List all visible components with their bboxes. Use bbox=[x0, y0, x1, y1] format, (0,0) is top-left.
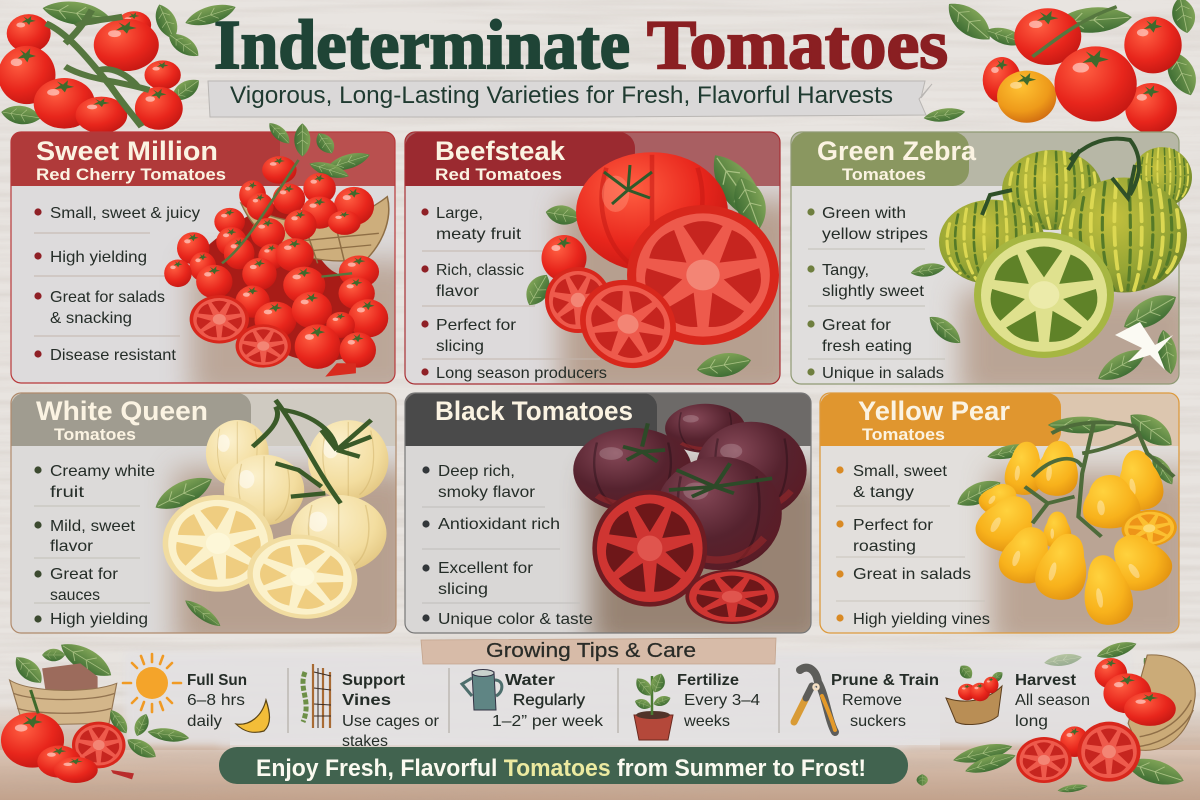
icon: harvest basket bbox=[946, 662, 1005, 724]
tip: Support Vines: Vines bbox=[342, 692, 391, 709]
illustration: red cherry tomatoes in basket bbox=[164, 120, 389, 377]
tip: Water Regularly bbox=[462, 670, 604, 730]
tip: Harvest: long bbox=[1015, 713, 1048, 730]
panel heading: Yellow Pear bbox=[858, 396, 1010, 444]
panel heading: Sweet Million bbox=[36, 136, 226, 184]
bullet list: Beefsteak: Perfect for bbox=[436, 317, 517, 334]
bullet list: Yellow Pear: roasting bbox=[853, 538, 916, 555]
title: Tomatoes bbox=[647, 7, 948, 84]
bullet list: Beefsteak: Long season producers bbox=[436, 365, 607, 382]
bullet list: Green Zebra: Great for bbox=[822, 317, 892, 334]
bullet list: Yellow Pear: & tangy bbox=[853, 484, 914, 501]
icon: trellis bbox=[303, 664, 331, 728]
bullet list: White Queen: Great for bbox=[50, 566, 119, 583]
tip: Fertilize: Fertilize bbox=[677, 672, 739, 689]
bullet list: Black Tomatoes: Deep rich, bbox=[438, 463, 515, 480]
bullet list: Green Zebra: Tangy, bbox=[822, 262, 869, 279]
bullet list: Green Zebra: yellow stripes bbox=[822, 226, 928, 243]
bullet list: Sweet Million: Small, sweet & juicy bbox=[50, 205, 200, 222]
tip: Water Regularly: Regularly bbox=[513, 692, 585, 709]
growing tips strip bbox=[123, 638, 1130, 750]
bullet list: Green Zebra: slightly sweet bbox=[822, 283, 925, 300]
bullet list: White Queen: sauces bbox=[50, 587, 100, 604]
panel: Black Tomatoes bbox=[405, 393, 830, 650]
tip: Harvest: Harvest bbox=[1015, 672, 1077, 689]
panel: Yellow Pear bbox=[819, 392, 1180, 634]
tip: Support Vines bbox=[303, 664, 440, 750]
bullet list: White Queen bbox=[34, 463, 155, 628]
panel heading: Beefsteak: Beefsteak bbox=[435, 136, 566, 166]
bullet list: Sweet Million bbox=[34, 205, 200, 364]
icon: potted plant bbox=[632, 671, 673, 740]
bullet list: Beefsteak: Rich, classic bbox=[436, 262, 524, 279]
bullet list: Yellow Pear: High yielding vines bbox=[853, 611, 990, 628]
bullet list: Beefsteak: meaty fruit bbox=[436, 226, 522, 243]
panel heading: Sweet Million: Sweet Million bbox=[36, 136, 218, 166]
panel heading: Yellow Pear: Tomatoes bbox=[862, 425, 945, 444]
illustration: black tomatoes bbox=[573, 404, 807, 624]
tip: Full Sun bbox=[123, 654, 270, 732]
bullet list: Beefsteak bbox=[421, 205, 607, 382]
panel heading: Yellow Pear: Yellow Pear bbox=[858, 396, 1010, 426]
tip: Water Regularly: Water bbox=[505, 672, 555, 689]
tip: Fertilize: weeks bbox=[683, 713, 730, 730]
tip: Fertilize bbox=[632, 671, 760, 740]
panel: White Queen bbox=[11, 393, 415, 650]
tip: Water Regularly: 1–2” per week bbox=[492, 713, 604, 730]
bullet list: Green Zebra bbox=[807, 205, 945, 382]
bullet list: White Queen: Creamy white bbox=[50, 463, 155, 480]
tip: Support Vines: stakes bbox=[342, 733, 388, 750]
icon: pruning shears bbox=[794, 668, 835, 732]
bullet list: Green Zebra: Unique in salads bbox=[822, 365, 944, 382]
bullet list: Yellow Pear: Small, sweet bbox=[853, 463, 948, 480]
tip: Full Sun: daily bbox=[187, 713, 222, 730]
icon: sun bbox=[123, 654, 181, 712]
corner illustration: bottom-right basket and tomatoes bbox=[917, 638, 1195, 794]
tip: Full Sun: Full Sun bbox=[187, 672, 247, 689]
heading plank: Growing Tips & Care bbox=[421, 638, 776, 664]
panel: Beefsteak bbox=[405, 132, 800, 400]
bullet list: Sweet Million: Great for salads bbox=[50, 289, 165, 306]
tip: Harvest bbox=[946, 662, 1090, 730]
panel heading: Black Tomatoes: Black Tomatoes bbox=[435, 396, 633, 426]
bullet list: Beefsteak: slicing bbox=[436, 338, 484, 355]
panel heading: White Queen: Tomatoes bbox=[54, 425, 136, 444]
tip: Prune & Train bbox=[794, 668, 939, 732]
tip: Full Sun: 6–8 hrs bbox=[187, 692, 245, 709]
bullet list: White Queen: High yielding bbox=[50, 611, 148, 628]
bullet list: Black Tomatoes: slicing bbox=[438, 581, 488, 598]
corner illustration: bottom-left basket and tomatoes bbox=[1, 636, 190, 783]
bullet list: Black Tomatoes: Antioxidant rich bbox=[438, 516, 560, 533]
bullet list: Black Tomatoes: Unique color & taste bbox=[438, 611, 593, 628]
tip: Harvest: All season bbox=[1015, 692, 1090, 709]
title: Indeterminate bbox=[214, 7, 630, 84]
illustration: green zebra tomatoes bbox=[910, 139, 1192, 388]
bullet list: Yellow Pear: Great in salads bbox=[853, 566, 971, 583]
bullet list: Sweet Million: Disease resistant bbox=[50, 347, 177, 364]
title bbox=[214, 7, 948, 84]
panel heading: Beefsteak bbox=[435, 136, 566, 184]
bullet list: Green Zebra: fresh eating bbox=[822, 338, 912, 355]
icon: watering can bbox=[462, 670, 502, 710]
panel heading: Beefsteak: Red Tomatoes bbox=[435, 165, 562, 184]
tip: Prune & Train: Remove bbox=[842, 692, 902, 709]
tip: Prune & Train: suckers bbox=[850, 713, 906, 730]
subtitle ribbon: Vigorous, Long-Lasting Varieties for Fresh, Flavorful Harvests bbox=[230, 82, 893, 109]
panel heading: Green Zebra bbox=[817, 136, 977, 184]
panel heading: Sweet Million: Red Cherry Tomatoes bbox=[36, 165, 226, 184]
subtitle ribbon bbox=[208, 81, 932, 117]
heading plank: Growing Tips & Care: Growing Tips & Care bbox=[486, 640, 696, 662]
tip: Support Vines: Use cages or bbox=[342, 713, 440, 730]
tip: Prune & Train: Prune & Train bbox=[831, 672, 939, 689]
bullet list: White Queen: Mild, sweet bbox=[50, 518, 136, 535]
panel heading: Green Zebra: Tomatoes bbox=[842, 165, 926, 184]
bullet list: Green Zebra: Green with bbox=[822, 205, 906, 222]
bullet list: Beefsteak: flavor bbox=[436, 283, 480, 300]
panel heading: Green Zebra: Green Zebra bbox=[817, 136, 977, 166]
corner illustration: top-left tomatoes bbox=[0, 0, 239, 133]
bullet list: Black Tomatoes: Excellent for bbox=[438, 560, 534, 577]
tip: Support Vines: Support bbox=[342, 672, 406, 689]
panel: Sweet Million bbox=[10, 123, 396, 384]
bullet list: White Queen: fruit bbox=[50, 484, 85, 501]
illustration: white tomatoes bbox=[149, 400, 388, 630]
bullet list: Yellow Pear bbox=[836, 463, 990, 628]
bullet list: Black Tomatoes bbox=[422, 463, 593, 628]
bullet list: Sweet Million: & snacking bbox=[50, 310, 132, 327]
bullet list: Black Tomatoes: smoky flavor bbox=[438, 484, 536, 501]
panel heading: White Queen: White Queen bbox=[36, 396, 208, 426]
bullet list: Sweet Million: High yielding bbox=[50, 249, 147, 266]
panel: Green Zebra bbox=[791, 132, 1200, 400]
closing banner: Enjoy Fresh, Flavorful Tomatoes from Summer to Frost! bbox=[256, 755, 866, 782]
panel heading: White Queen bbox=[36, 396, 208, 444]
closing banner bbox=[219, 747, 908, 784]
tip: Fertilize: Every 3–4 bbox=[684, 692, 760, 709]
bullet list: White Queen: flavor bbox=[50, 538, 94, 555]
illustration: yellow pear tomatoes bbox=[952, 406, 1180, 628]
bullet list: Beefsteak: Large, bbox=[436, 205, 483, 222]
illustration: beefsteak tomatoes bbox=[520, 146, 779, 384]
bullet list: Yellow Pear: Perfect for bbox=[853, 517, 934, 534]
corner illustration: top-right tomatoes bbox=[922, 0, 1200, 134]
